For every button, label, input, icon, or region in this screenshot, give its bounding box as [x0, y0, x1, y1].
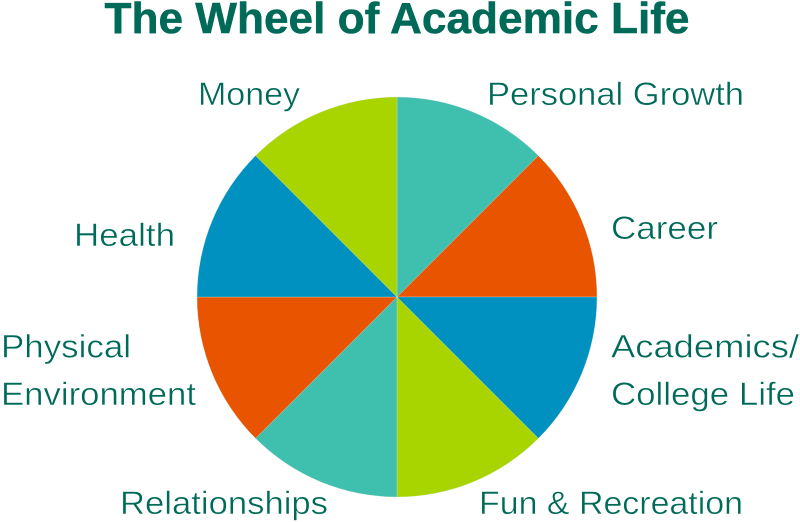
segment: money	[256, 97, 397, 297]
label: physical environment: Physical	[1, 328, 131, 364]
label: academics / college life: Academics/	[611, 328, 799, 364]
label: personal growth: Personal Growth	[487, 76, 744, 112]
label: career: Career	[611, 210, 718, 246]
label: academics / college life: College Life	[611, 376, 795, 412]
segment: health	[197, 156, 397, 297]
label: relationships: Relationships	[120, 485, 328, 521]
pie chart: wheel of life	[197, 97, 597, 497]
label: health: Health	[74, 217, 175, 253]
segment: career	[397, 156, 597, 297]
segment: fun and recreation	[397, 297, 538, 497]
segment: relationships	[256, 297, 397, 497]
label: fun and recreation: Fun & Recreation	[479, 485, 743, 521]
label: academics / college life	[611, 328, 799, 412]
segment: personal growth	[397, 97, 538, 297]
label: money: Money	[198, 76, 300, 112]
label: physical environment	[1, 328, 196, 412]
segment: physical environment	[197, 297, 397, 438]
segment: academics / college life	[397, 297, 597, 438]
label: physical environment: Environment	[1, 376, 196, 412]
